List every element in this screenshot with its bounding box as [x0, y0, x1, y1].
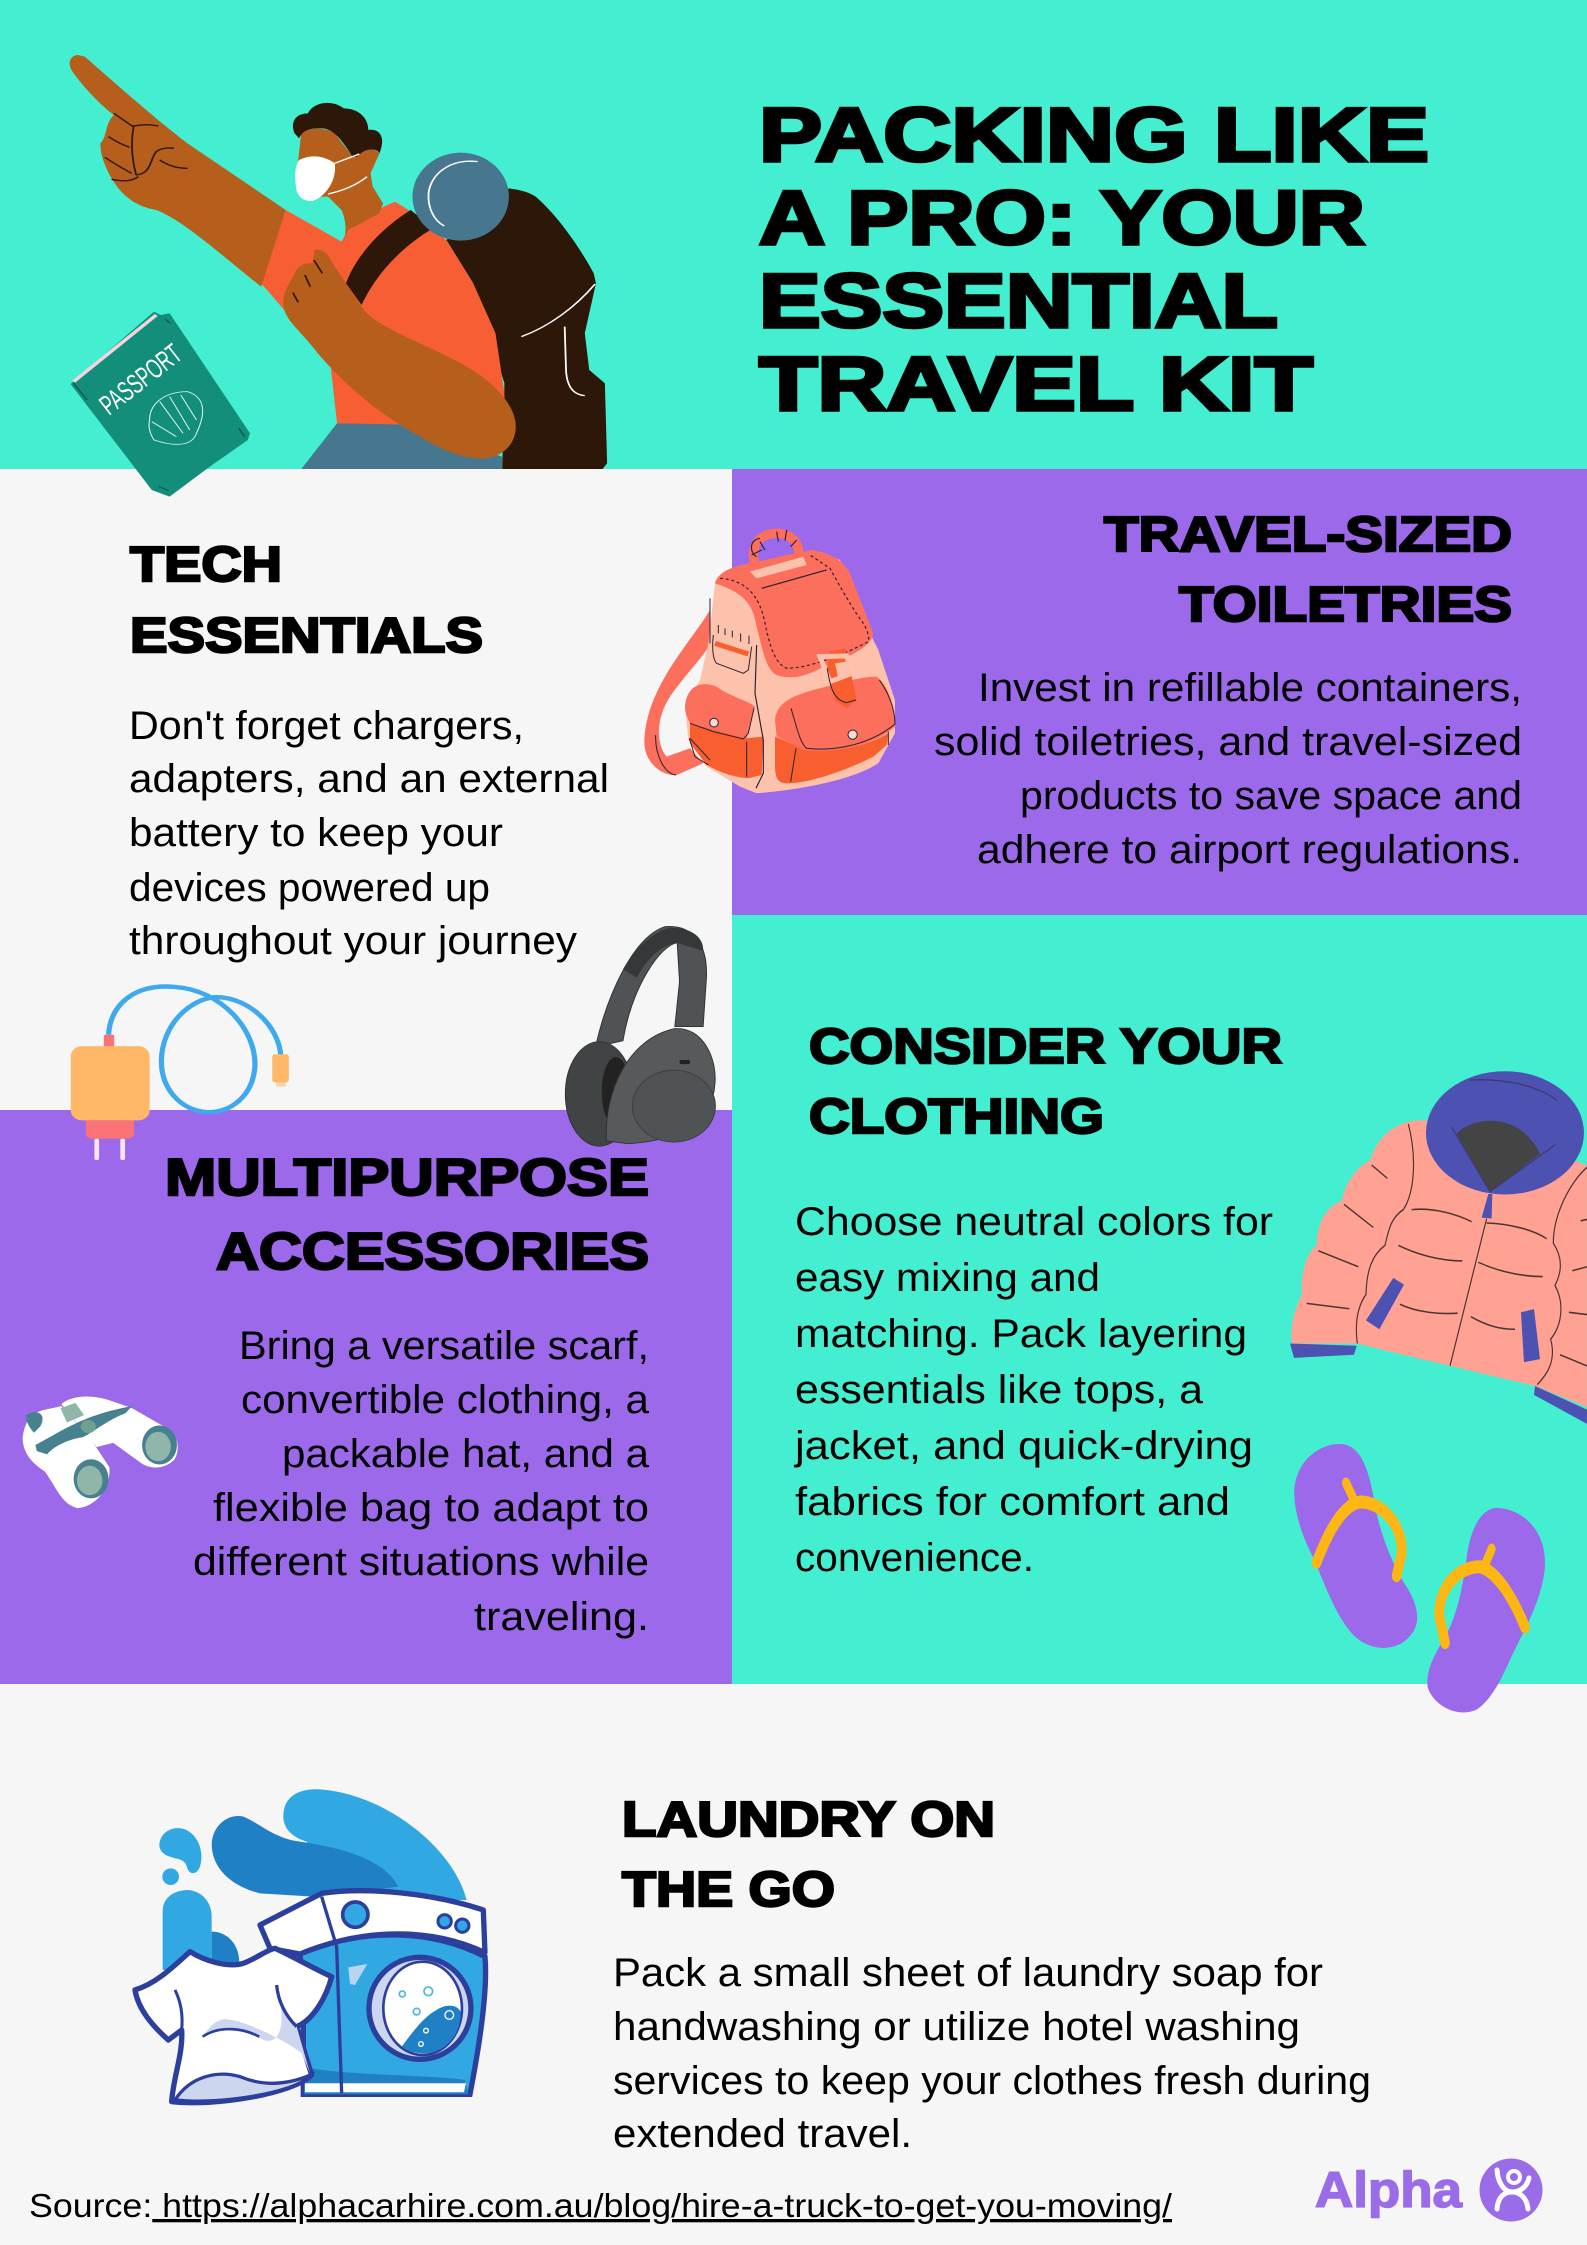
- text: laundry body: extended travel.: [613, 2112, 912, 2156]
- text: accessories body: Bring a versatile scarf,: [239, 1324, 649, 1368]
- panel: multipurpose accessories: [0, 1110, 732, 1684]
- text: laundry body: [613, 1951, 1371, 2156]
- heading: consider your clothing: CLOTHING: [809, 1090, 1104, 1144]
- icon: puffer jacket: [1290, 1071, 1587, 1424]
- panel: consider your clothing: [732, 915, 1587, 1712]
- text: clothing body: Choose neutral colors for: [795, 1200, 1273, 1244]
- icon: headphones: [565, 926, 715, 1146]
- text: tech body: Don't forget chargers,: [129, 704, 524, 748]
- icon: traveler with backpack: [70, 55, 607, 469]
- text: toiletries body: Invest in refillable containers,: [978, 666, 1522, 710]
- text: tech body: devices powered up: [129, 866, 490, 910]
- text: accessories body: flexible bag to adapt to: [213, 1486, 649, 1530]
- icon: washing machine and shirt: [135, 1789, 486, 2103]
- heading: consider your clothing: [809, 1020, 1282, 1144]
- title: ESSENTIAL: [759, 259, 1278, 344]
- heading: tech essentials: TECH: [130, 538, 282, 592]
- text: clothing body: essentials like tops, a: [795, 1368, 1204, 1412]
- text: toiletries body: solid toiletries, and travel-sized: [934, 720, 1522, 764]
- text: toiletries body: products to save space and: [1020, 774, 1522, 818]
- panel: travel-sized toiletries: [644, 469, 1587, 915]
- panel: laundry on the go: [0, 1684, 1587, 2245]
- logo: Alpha: [1315, 2158, 1542, 2222]
- text: tech body: throughout your journey: [129, 919, 577, 963]
- icon: passport: [71, 312, 250, 497]
- text: clothing body: matching. Pack layering: [795, 1312, 1247, 1356]
- text: tech body: adapters, and an external: [129, 757, 609, 801]
- panel: header: [0, 0, 1587, 497]
- text: accessories body: [193, 1324, 650, 1639]
- heading: laundry on the go: THE GO: [622, 1863, 835, 1917]
- text: accessories body: traveling.: [474, 1595, 649, 1639]
- text: accessories body: convertible clothing, a: [241, 1378, 650, 1422]
- text: toiletries body: [934, 666, 1522, 872]
- text: laundry body: handwashing or utilize hotel washing: [613, 2005, 1300, 2049]
- text: toiletries body: adhere to airport regulations.: [977, 828, 1522, 872]
- heading: travel-sized toiletries: [1104, 508, 1512, 632]
- text: clothing body: easy mixing and: [795, 1256, 1100, 1300]
- logo: Alpha: Alpha: [1315, 2162, 1463, 2218]
- heading: multipurpose accessories: MULTIPURPOSE: [165, 1149, 649, 1207]
- text: clothing body: jacket, and quick-drying: [794, 1424, 1253, 1468]
- heading: laundry on the go: [622, 1793, 995, 1917]
- title: PACKING LIKE: [759, 93, 1429, 178]
- icon: backpack: [644, 530, 895, 793]
- text: clothing body: [794, 1200, 1273, 1580]
- title: A PRO: YOUR: [759, 176, 1365, 261]
- title: TRAVEL KIT: [759, 342, 1313, 427]
- text: tech body: battery to keep your: [129, 811, 503, 855]
- title: [759, 93, 1429, 427]
- icon: flip-flops: [1294, 1444, 1545, 1712]
- text: clothing body: convenience.: [795, 1536, 1034, 1580]
- text: accessories body: different situations while: [193, 1540, 649, 1584]
- heading: laundry on the go: LAUNDRY ON: [622, 1793, 995, 1847]
- heading: travel-sized toiletries: TOILETRIES: [1179, 578, 1512, 632]
- icon: binoculars: [23, 1396, 178, 1508]
- icon: charger and cable: [71, 987, 289, 1160]
- heading: multipurpose accessories: ACCESSORIES: [216, 1223, 649, 1281]
- source line: Source: https://alphacarhire.com.au/blog/hire-a-truck-to-get-you-moving/: [29, 2187, 1173, 2224]
- text: tech body: [129, 704, 609, 963]
- text: laundry body: services to keep your clothes fresh during: [613, 2059, 1371, 2103]
- text: laundry body: Pack a small sheet of laundry soap for: [613, 1951, 1323, 1995]
- heading: tech essentials: [130, 538, 483, 663]
- heading: consider your clothing: CONSIDER YOUR: [809, 1020, 1282, 1074]
- icon: passport: PASSPORT: [94, 338, 188, 421]
- heading: multipurpose accessories: [165, 1149, 649, 1281]
- text: accessories body: packable hat, and a: [282, 1432, 650, 1476]
- text: clothing body: fabrics for comfort and: [795, 1480, 1230, 1524]
- panel: tech essentials: [0, 469, 732, 1160]
- heading: travel-sized toiletries: TRAVEL-SIZED: [1104, 508, 1512, 562]
- heading: tech essentials: ESSENTIALS: [130, 609, 483, 663]
